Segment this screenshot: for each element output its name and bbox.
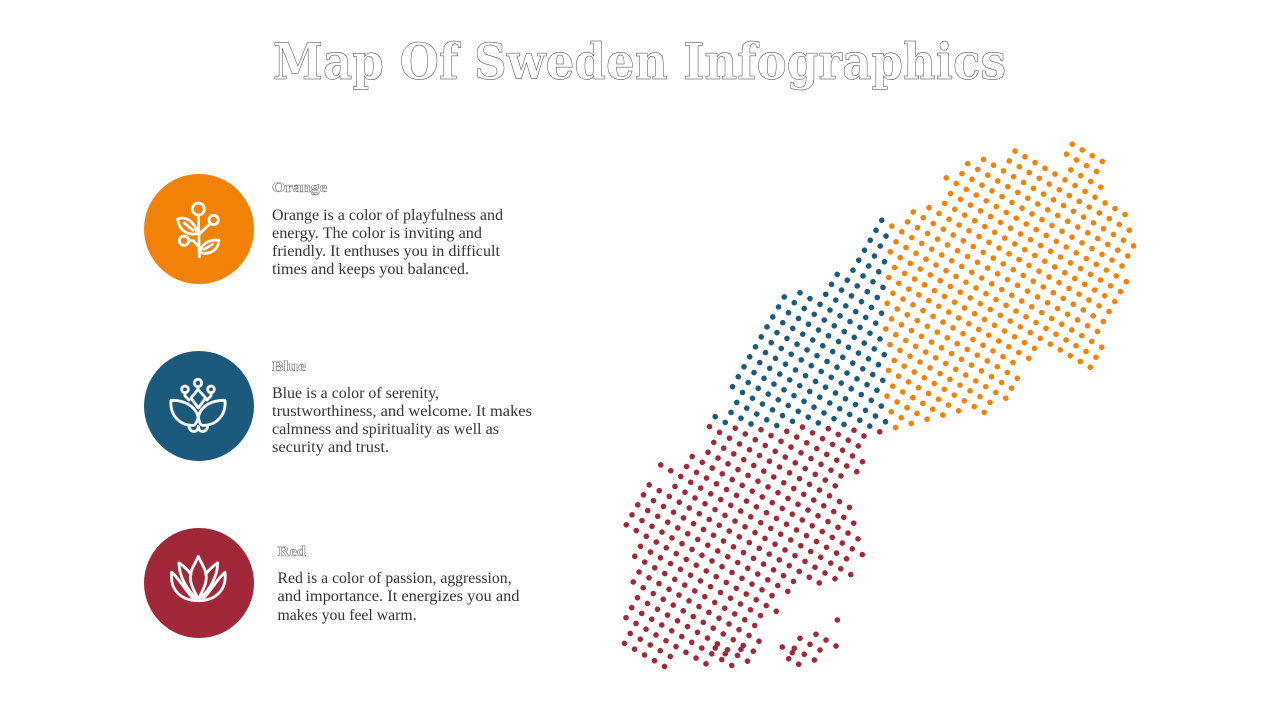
text block: red description: Red is a color of passion, aggression, (278, 570, 512, 587)
title: Map Of Sweden Infographics (273, 32, 1006, 91)
map region: orange north (886, 144, 1134, 428)
panel: red (144, 528, 520, 638)
map region: red south and island (624, 427, 880, 666)
heading: Red: Red (278, 544, 307, 560)
panel: orange (144, 174, 503, 284)
text block: blue description: Blue is a color of serenity, (272, 385, 439, 402)
text block: orange description: Orange is a color of playfulness and (272, 207, 503, 224)
text block: blue description: trustworthiness, and welcome. It makes (272, 403, 532, 420)
text block: blue description: security and trust. (272, 439, 389, 456)
panel: blue (144, 351, 532, 461)
heading: Orange: Orange (272, 180, 327, 196)
text block: red description: makes you feel warm. (278, 607, 416, 624)
icon: red lotus badge (144, 528, 254, 638)
text block: orange description: times and keeps you balanced. (272, 261, 469, 278)
map region: blue middle (715, 220, 886, 426)
heading: Blue: Blue (272, 359, 306, 375)
text block: blue description (272, 385, 532, 456)
text block: blue description: calmness and spirituality as well as (272, 421, 499, 438)
text block: red description (278, 570, 520, 624)
text block: orange description: energy. The color is inviting and (272, 225, 482, 242)
dot map of Sweden (624, 144, 1134, 666)
text block: red description: and importance. It energizes you and (278, 588, 520, 605)
icon: blue lotus badge (144, 351, 254, 461)
text block: orange description: friendly. It enthuses you in difficult (272, 243, 501, 260)
text block: orange description (272, 207, 503, 278)
icon: orange branch badge (144, 174, 254, 284)
